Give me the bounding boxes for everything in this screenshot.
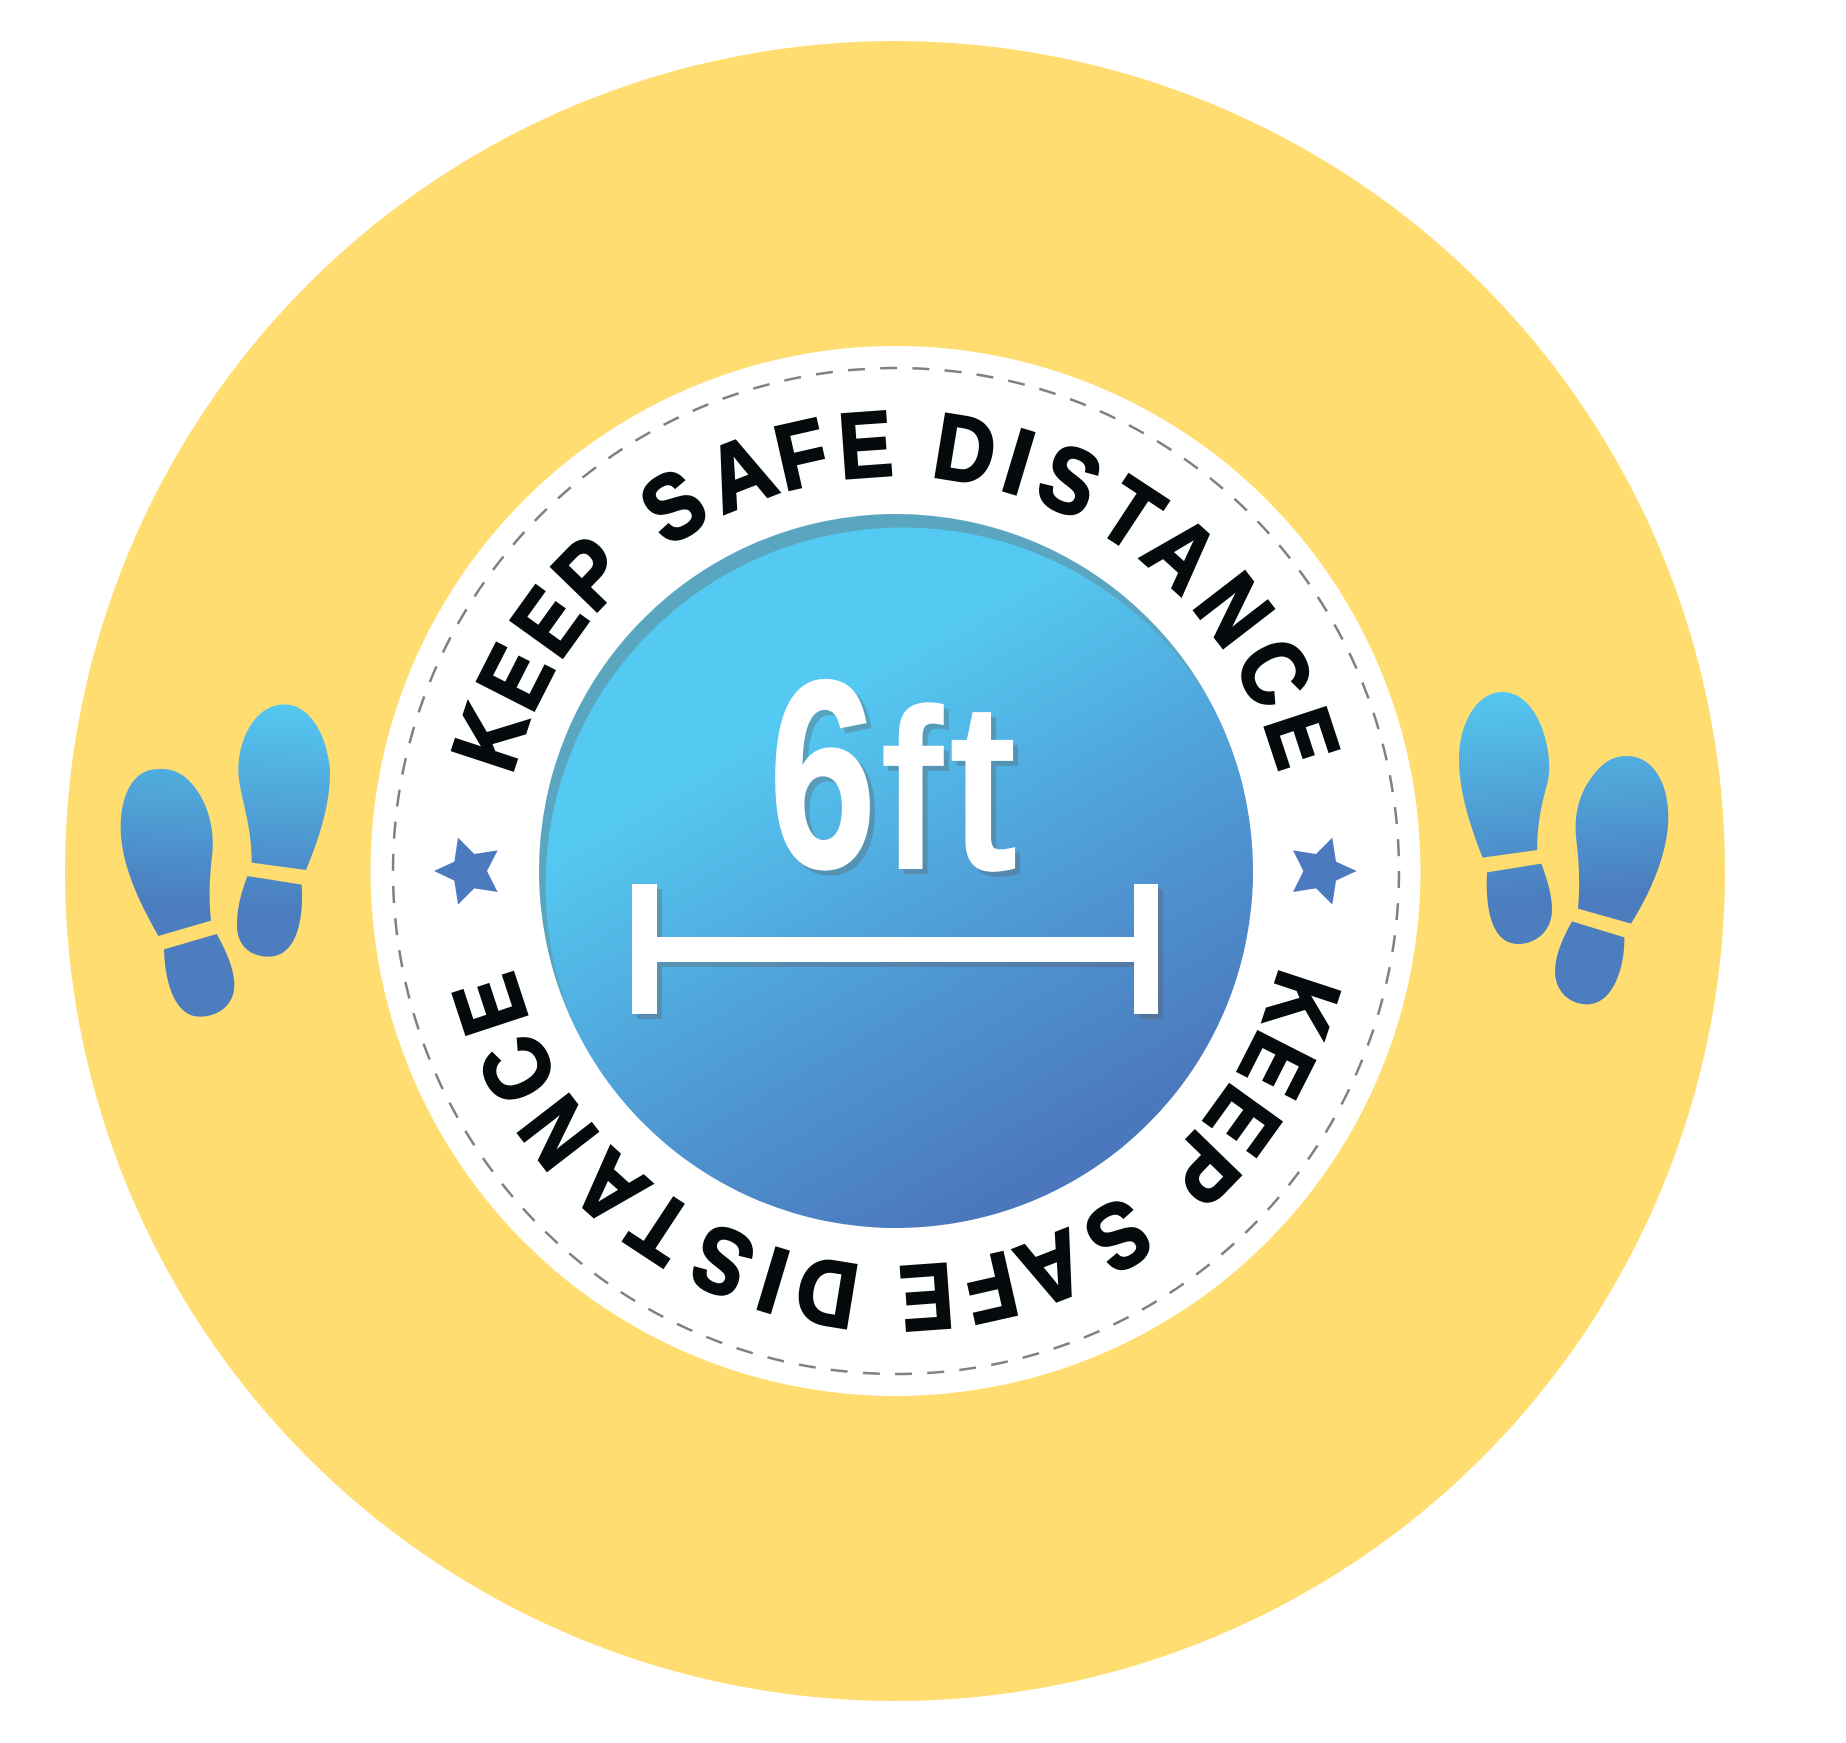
curved text: lower KEEP SAFE DISTANCE: D [789, 1237, 865, 1349]
curved text: upper KEEP SAFE DISTANCE [432, 391, 1359, 782]
curved text: lower KEEP SAFE DISTANCE: S [1068, 1177, 1169, 1294]
heading: 6ft [769, 626, 1014, 924]
curved text: lower KEEP SAFE DISTANCE: K [1243, 960, 1360, 1049]
curved text: upper KEEP SAFE DISTANCE: E [1244, 696, 1359, 779]
curved text: upper KEEP SAFE DISTANCE: F [765, 398, 837, 511]
curved text: upper KEEP SAFE DISTANCE: D [927, 393, 1003, 505]
curved text: upper KEEP SAFE DISTANCE: I [992, 409, 1045, 516]
curved text: upper KEEP SAFE DISTANCE: K [432, 693, 549, 782]
curved text: lower KEEP SAFE DISTANCE: C [458, 1019, 578, 1120]
heading: 6ft: 6 [769, 626, 876, 924]
blue centre disc [530, 505, 1262, 1242]
curved text: upper KEEP SAFE DISTANCE: A [1125, 495, 1239, 612]
curved text: upper KEEP SAFE DISTANCE: S [1024, 422, 1116, 539]
dashed ring [393, 368, 1399, 1374]
icon: measurement bar [632, 884, 1158, 1014]
curved text: upper KEEP SAFE DISTANCE: N [1175, 555, 1292, 665]
curved text: lower KEEP SAFE DISTANCE: E [433, 963, 548, 1046]
white badge disc [370, 346, 1420, 1396]
curved text: lower KEEP SAFE DISTANCE: I [747, 1226, 800, 1333]
icon: right footprints [1459, 692, 1668, 1004]
curved text: lower KEEP SAFE DISTANCE: E [1185, 1068, 1300, 1172]
curved text: lower KEEP SAFE DISTANCE: P [1146, 1113, 1259, 1225]
icon: right star [1293, 838, 1357, 905]
curved text: lower KEEP SAFE DISTANCE: N [500, 1077, 617, 1187]
curved text: upper KEEP SAFE DISTANCE: T [1082, 457, 1181, 572]
curved text: upper KEEP SAFE DISTANCE: E [457, 630, 574, 725]
curved text: lower KEEP SAFE DISTANCE: E [1218, 1017, 1335, 1112]
curved text: lower KEEP SAFE DISTANCE: A [1003, 1208, 1100, 1328]
heading: 6ft: f [883, 666, 941, 914]
curved text: upper KEEP SAFE DISTANCE: P [533, 517, 646, 629]
curved text: upper KEEP SAFE DISTANCE: S [623, 448, 724, 565]
curved text: upper KEEP SAFE DISTANCE: E [835, 391, 896, 499]
curved text: lower KEEP SAFE DISTANCE [433, 960, 1360, 1351]
icon: left footprints [121, 704, 330, 1017]
curved text: lower KEEP SAFE DISTANCE: T [611, 1170, 710, 1285]
curved text: lower KEEP SAFE DISTANCE: F [955, 1231, 1027, 1344]
curved text: upper KEEP SAFE DISTANCE: C [1214, 622, 1334, 723]
curved text: lower KEEP SAFE DISTANCE: A [553, 1130, 667, 1247]
6ft distance label and bar with shadow [632, 626, 1158, 1014]
heading: 6ft: t [951, 654, 1014, 917]
curved text: upper KEEP SAFE DISTANCE: A [692, 414, 789, 534]
icon: left star [434, 838, 498, 905]
curved text: lower KEEP SAFE DISTANCE: E [896, 1243, 957, 1351]
curved text: lower KEEP SAFE DISTANCE: S [676, 1203, 768, 1320]
curved text: upper KEEP SAFE DISTANCE: E [492, 570, 607, 674]
